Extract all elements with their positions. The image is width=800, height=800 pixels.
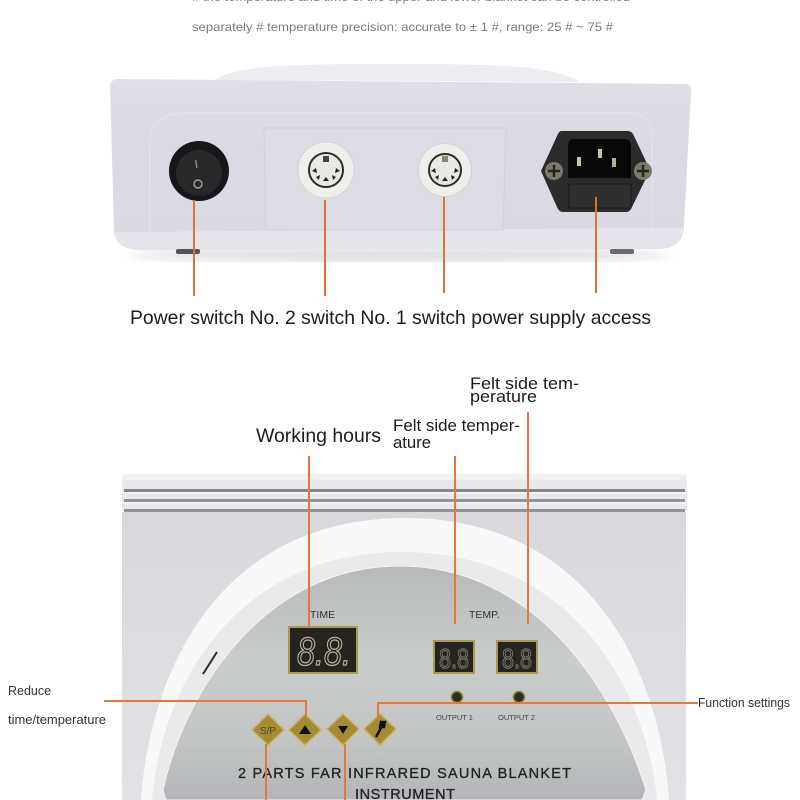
front callout lines (104, 412, 698, 800)
label: felt side temperature 2: Felt side tem- (470, 374, 579, 393)
rear callout lines (194, 197, 596, 296)
product name (238, 766, 571, 800)
icon: power inlet (541, 131, 652, 212)
device body (122, 512, 686, 800)
spec text block (192, 0, 630, 34)
icon: No. 2 DIN socket (298, 142, 354, 198)
button: S/P: S/P (260, 726, 276, 737)
product name: 2 PARTS FAR INFRARED SAUNA BLANKET (238, 766, 571, 782)
label: function settings: Function settings (698, 696, 790, 710)
temperature display 1: 8.8 (439, 643, 469, 674)
rear callout caption: Power switch No. 2 switch No. 1 switch power supply access (130, 307, 651, 329)
button: up (289, 714, 321, 745)
label: felt side temperature 1: ature (393, 434, 431, 452)
ribbed top edge (122, 474, 687, 512)
label: felt side temperature 2 (470, 374, 579, 406)
label: felt side temperature 2: perature (470, 387, 537, 406)
time label: TIME (310, 609, 335, 621)
connector recess (264, 128, 506, 230)
time display: 8.8. (297, 630, 351, 674)
output indicators: OUTPUT 1 (436, 713, 473, 722)
label: felt side temperature 1: Felt side temper- (393, 417, 520, 435)
label: working hours: Working hours (256, 426, 381, 447)
label: reduce time/temperature (8, 684, 106, 727)
label: reduce time/temperature: Reduce (8, 684, 51, 698)
control panel (163, 566, 646, 800)
button: down (327, 714, 359, 745)
button: function wrench (364, 714, 396, 745)
rear view of controller (110, 64, 691, 261)
temp label: TEMP. (469, 609, 500, 621)
front view of controller (122, 474, 687, 800)
icon: No. 1 DIN socket (418, 144, 472, 196)
label: reduce time/temperature: time/temperature (8, 713, 106, 727)
output indicators (436, 692, 535, 722)
spec text block: separately # temperature precision: accurate to ± 1 #, range: 25 # ~ 75 # (192, 20, 613, 34)
white arch (141, 518, 669, 800)
temperature display 2: 8.8 (502, 643, 532, 674)
button: S/P (252, 714, 284, 745)
icon: power rocker switch (169, 141, 229, 201)
label: felt side temperature 1 (393, 417, 520, 452)
output indicators: OUTPUT 2 (498, 713, 535, 722)
